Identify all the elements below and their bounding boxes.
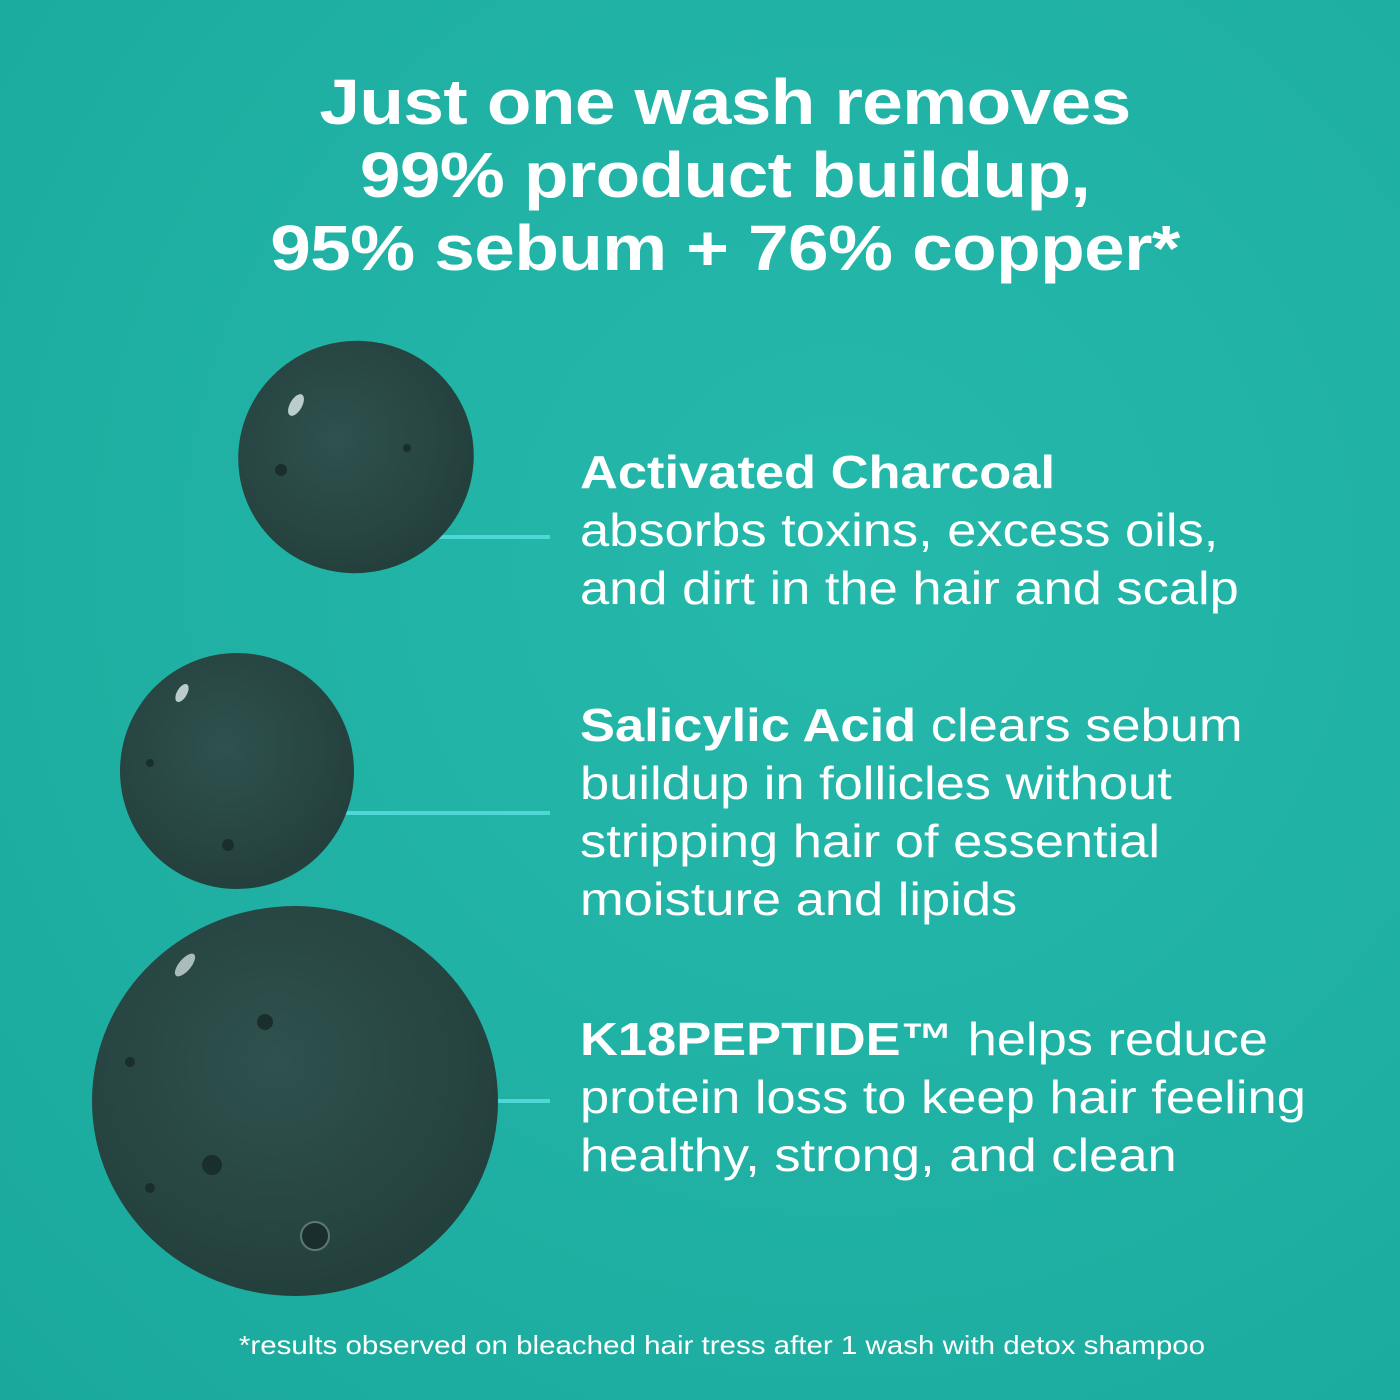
title [270,66,1180,284]
blob: peptide [92,906,498,1296]
title: 99% product buildup, [360,139,1090,211]
footnote: *results observed on bleached hair tress after 1 wash with detox shampoo [239,1330,1205,1360]
title: Just one wash removes [319,66,1131,138]
connector lines [345,537,550,1101]
text: activated charcoal [580,446,1239,614]
text: k18peptide: healthy, strong, and clean [580,1129,1177,1181]
text: salicylic acid: buildup in follicles without [580,757,1172,809]
text: salicylic acid: moisture and lipids [580,873,1017,925]
text: k18peptide: protein loss to keep hair feeling [580,1071,1306,1123]
text: salicylic acid: stripping hair of essential [580,815,1160,867]
text: k18peptide: K18PEPTIDE™ helps reduce [580,1013,1268,1065]
title: 95% sebum + 76% copper* [270,212,1180,284]
text: activated charcoal: absorbs toxins, excess oils, [580,504,1218,556]
text: activated charcoal: Activated Charcoal [580,446,1055,498]
text: k18peptide [580,1013,1306,1181]
text: salicylic acid: Salicylic Acid clears sebum [580,699,1243,751]
blob: salicylic [120,653,354,889]
text: activated charcoal: and dirt in the hair and scalp [580,562,1239,614]
text: salicylic acid [580,699,1243,925]
blob: charcoal [205,308,507,606]
